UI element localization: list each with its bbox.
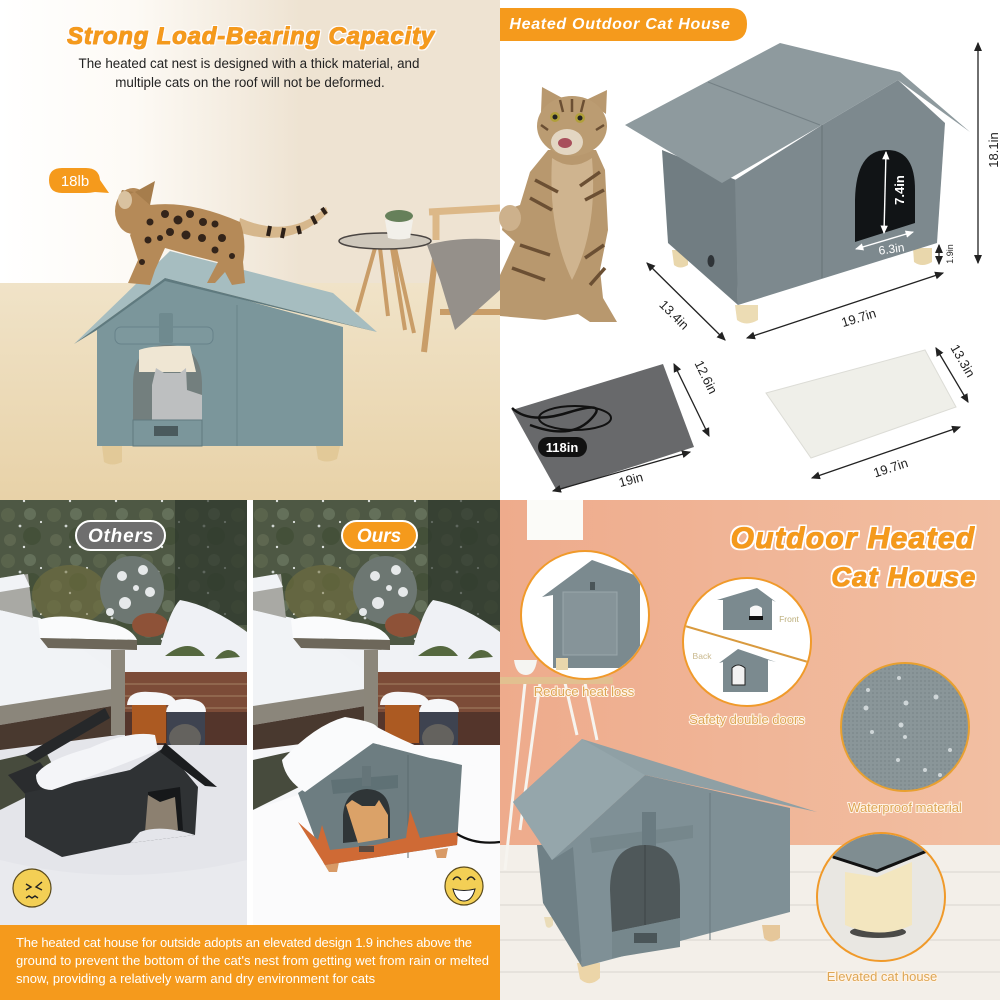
house xyxy=(74,251,377,464)
sub title: Cat House xyxy=(831,562,977,592)
chair and blanket xyxy=(424,208,500,352)
dimension: pad 12.6in xyxy=(674,358,721,436)
gray heated house xyxy=(282,717,480,872)
dimension: depth 13.4in xyxy=(647,263,725,340)
heading tag: Heated Outdoor Cat House xyxy=(509,16,731,33)
caption: Waterproof material xyxy=(848,800,962,815)
icon: happy emoji xyxy=(445,867,483,905)
weight badge: 18lb xyxy=(61,173,89,190)
dimension: mat 13.3in: 13.3in xyxy=(948,342,978,380)
heading tag xyxy=(500,8,747,41)
caption bar: The heated cat house for outside adopts an elevated design 1.9 inches above the xyxy=(16,935,472,950)
caption bar xyxy=(0,925,500,1000)
dimension: mat 13.3in xyxy=(936,342,978,402)
feature: elevated cat house xyxy=(816,832,946,983)
cat xyxy=(499,87,617,322)
side table xyxy=(500,660,613,870)
panel: load-bearing capacity xyxy=(0,0,500,500)
caption bar: ground to prevent the bottom of the cat's nest from getting wet from rain or melted xyxy=(16,953,489,968)
main house xyxy=(513,739,817,983)
panel: comparison ours xyxy=(253,500,500,872)
panel: features xyxy=(500,500,1000,1000)
dimension: door 7.4in xyxy=(884,152,907,233)
feature: safety double doors: Front xyxy=(779,614,800,624)
panel: comparison others xyxy=(0,500,247,925)
dimension: mat 19.7in xyxy=(812,427,960,480)
dimension: mat 19.7in: 19.7in xyxy=(871,455,910,480)
caption bar: snow, providing a relatively warm and dry environment for cats xyxy=(16,971,376,986)
insulation mat xyxy=(766,350,956,458)
panel: product dimensions xyxy=(499,0,1000,500)
feature: reduce heat loss xyxy=(521,551,649,699)
others label: Others xyxy=(88,526,154,547)
weight badge xyxy=(49,168,109,193)
heating pad: 118in xyxy=(546,440,578,455)
feature: safety double doors xyxy=(683,578,811,727)
heating pad xyxy=(512,364,694,491)
pendant lamp xyxy=(527,500,583,540)
ours label xyxy=(342,521,417,550)
dimension: pad 12.6in: 12.6in xyxy=(692,358,721,396)
description: The heated cat nest is designed with a thick material, and xyxy=(79,56,419,71)
caption: Safety double doors xyxy=(689,712,805,727)
main title: Outdoor Heated xyxy=(731,522,975,555)
title: Strong Load-Bearing Capacity xyxy=(67,23,436,50)
cat on roof xyxy=(115,181,328,285)
caption: Reduce heat loss xyxy=(534,684,635,699)
dimension: pad 19in xyxy=(553,452,690,491)
description: multiple cats on the roof will not be deformed. xyxy=(115,75,385,90)
dimension: width 19.7in: 19.7in xyxy=(840,305,878,330)
dimension: door 7.4in: 7.4in xyxy=(892,175,907,205)
dark house xyxy=(8,708,217,857)
icon: unhappy emoji xyxy=(13,869,51,907)
dimension: door 6.3in: 6.3in xyxy=(878,240,905,258)
caption: Elevated cat house xyxy=(827,969,937,984)
dimension: depth 13.4in: 13.4in xyxy=(656,297,692,333)
house diagram xyxy=(625,43,970,324)
side table xyxy=(339,210,431,333)
dimension: legs 1.9in xyxy=(939,244,955,264)
others label xyxy=(76,521,165,550)
feature: safety double doors: Back xyxy=(693,651,712,661)
feature: waterproof material xyxy=(841,663,969,815)
dimension: width 19.7in xyxy=(747,273,943,338)
ours label: Ours xyxy=(357,526,401,547)
dimension: pad 19in: 19in xyxy=(617,469,645,490)
dimension: legs 1.9in: 1.9in xyxy=(945,244,955,264)
dimension: door 6.3in xyxy=(856,232,913,258)
